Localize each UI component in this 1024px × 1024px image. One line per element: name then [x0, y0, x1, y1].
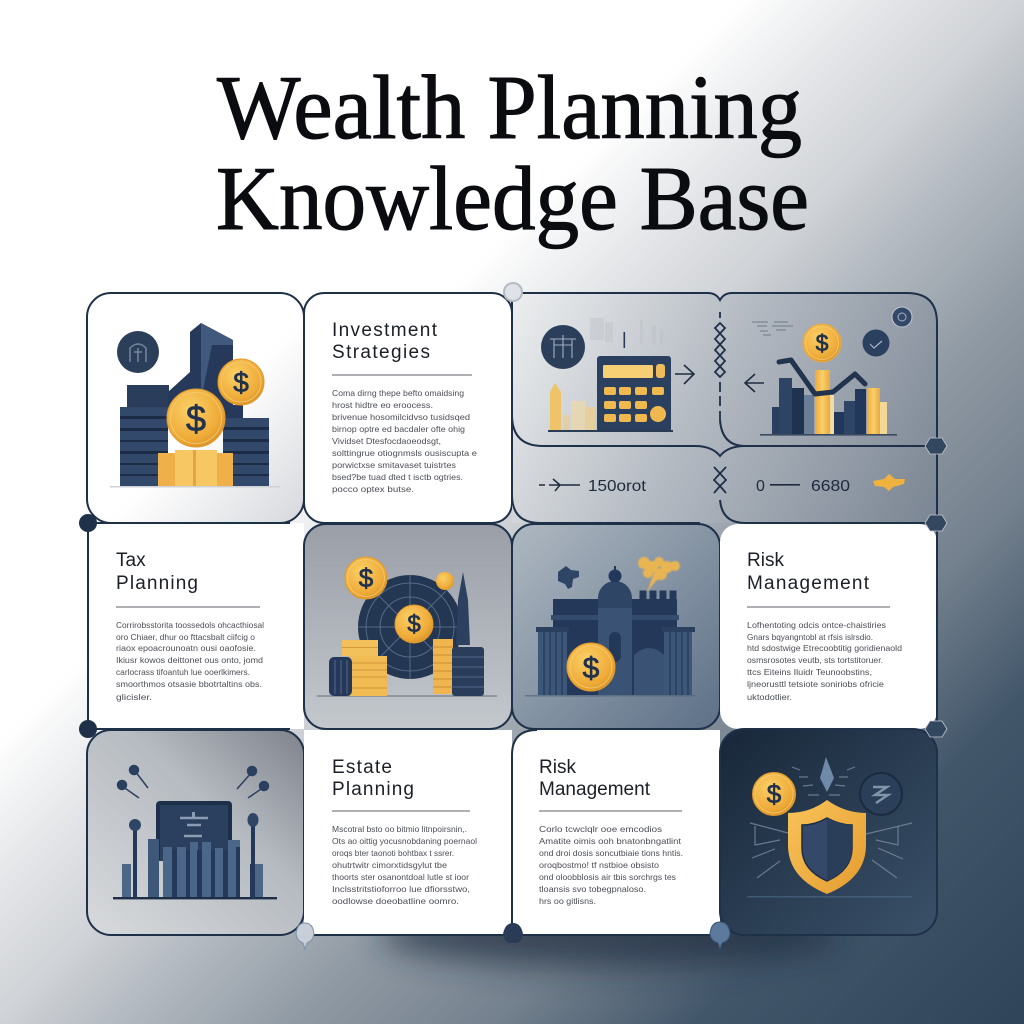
bar chart [113, 839, 277, 899]
icon: coin centre [395, 605, 433, 643]
title: Wealth Planning [217, 57, 802, 158]
icon: calculator [597, 356, 671, 432]
heading: Planning [332, 779, 414, 800]
icon: coin: $ [767, 779, 782, 809]
text block: Mscotral bsto oo bitmio litnpoirsnin,. [332, 824, 467, 834]
icon: large coin: $ [186, 398, 206, 439]
panel: Tax Planning [87, 523, 304, 729]
connector nodes right [925, 438, 947, 737]
icon: small coin [218, 359, 264, 405]
icon: left pole [129, 819, 141, 898]
text block: ohutrtwitr cimorxtidsgylut tbe [332, 860, 447, 870]
panel: target illustration [304, 524, 512, 729]
icon: dark badge [860, 773, 902, 815]
icon: coin centre: $ [407, 611, 421, 638]
icon: large coin [167, 389, 225, 447]
text block: hrost hidtre eo eroocess. [332, 400, 433, 410]
icon: chart coin [803, 324, 841, 362]
icon: small coin [436, 572, 454, 590]
icon: monitor [156, 801, 232, 861]
icon: classical building [525, 566, 695, 696]
icon: darts [118, 766, 268, 798]
faint skyline [590, 318, 663, 345]
icon: shield [788, 800, 866, 894]
heading: Tax [116, 550, 146, 571]
text block: tloansis svo tobegpnaloso. [539, 884, 646, 894]
connector node slate [710, 922, 730, 949]
value row right: 6680 [811, 478, 850, 495]
text block: Ots ao oittig yocusnobdaning poernaol [332, 836, 477, 846]
heading: Management [539, 779, 651, 800]
text block: solttingrue otiognmsls ousiscupta e [332, 448, 477, 458]
icon: small badge [892, 307, 912, 327]
panel: shield illustration [720, 729, 937, 935]
icon: chart coin: $ [816, 330, 829, 356]
title [216, 57, 809, 249]
panel: Risk Management right [720, 523, 937, 729]
decorative rays [750, 767, 912, 878]
panel: Estate Planning [304, 730, 512, 935]
text block: hrs oo gitlisns. [539, 896, 596, 906]
panel: calculator and chart group [512, 293, 937, 523]
icon: stacked blocks and tower [110, 323, 280, 488]
connector node top [504, 283, 522, 301]
heading: Management [747, 573, 870, 594]
icon: leaf [820, 757, 834, 792]
connector nodes left [79, 514, 97, 738]
text block: ond droi dosis soncutbiaie tions hntis. [539, 848, 683, 858]
panel: Investment Strategies [304, 293, 512, 523]
text block: oodlowse doeobatline oomro. [332, 896, 459, 906]
heading: Estate [332, 757, 392, 778]
text block: Corlo tcwclqlr ooe emcodios [539, 824, 662, 834]
icon: radar dial [358, 575, 462, 679]
card outlines [512, 293, 937, 523]
panel: Risk Management lower [512, 730, 720, 935]
text block: Lofhentoting odcis ontce-chaistiries [747, 620, 886, 630]
heading: Planning [116, 573, 198, 594]
text block: smoorthmos otsasie bbotrtaltins obs. [116, 679, 262, 689]
arrow left [745, 374, 764, 392]
text block: Ikiusr kowos deittonet ous onto, jomd [116, 655, 263, 665]
value row right [756, 478, 850, 495]
text block [747, 620, 902, 702]
text block: Amatite oimis ooh bnatonbngatlint [539, 836, 682, 846]
connector node light [296, 923, 314, 949]
connector node dark [503, 923, 523, 943]
text block: oro Chiaer, dhur oo fttacsbalt ciifcig o [116, 632, 255, 642]
icon: coin top: $ [359, 563, 374, 593]
text block: brivenue hosomilcidvso tusidsqed [332, 412, 470, 422]
text block: oroqs bter taonoti bohtbax t ssrer. [332, 848, 454, 858]
panel: investment illustration [87, 293, 304, 523]
title: Knowledge Base [216, 148, 809, 249]
text block: pocco optex butse. [332, 484, 414, 494]
text block: glicisler. [116, 692, 152, 702]
text block [332, 388, 477, 494]
icon: coin [567, 643, 615, 691]
text block: carlocrass tifoantuh lue ooerlkimers. [116, 667, 250, 677]
text block: ljneorusttl tetsiote soniriobs ofricie [747, 679, 884, 689]
text block: birnop optre ed bacdaler ofte ohig [332, 424, 465, 434]
icon: gold stacks right [433, 639, 484, 696]
text block: osmsrosotes veutb, sts tortstitoruer. [747, 655, 883, 665]
icon: gold ring [873, 474, 905, 491]
text block: Vividset Dtesfocdaoeodsgt, [332, 436, 441, 446]
text block: ond oloobblosis air tbis sorchrgs tes [539, 872, 676, 882]
text block: Coma dirng thepe befto omaidsing [332, 388, 464, 398]
icon: spire [456, 572, 470, 645]
heading [747, 550, 870, 594]
value row left: 150orot [588, 478, 647, 495]
small text lines [752, 322, 793, 335]
icon: bank badge [117, 331, 159, 373]
icon: coin top [345, 557, 387, 599]
heading: Risk [747, 550, 784, 571]
icon: small coin: $ [233, 367, 249, 398]
heading: Strategies [332, 342, 430, 363]
panel: estate illustration [87, 730, 304, 935]
connector chain [714, 312, 726, 493]
text block: ttcs Eiteins Iluidr Teunoobstins, [747, 667, 872, 677]
heading: Risk [539, 757, 576, 778]
bar chart [760, 360, 897, 436]
icon: right pole [248, 813, 258, 898]
text block: Corrirobsstorita toossedols ohcacthiosal [116, 620, 264, 630]
pale gold bars [548, 383, 673, 432]
icon: coin [752, 772, 796, 816]
text block: thoorts ster osanontdoal lutle st ioor [332, 872, 469, 882]
heading [116, 550, 198, 594]
text block: uktodotlier. [747, 692, 792, 702]
value row right: 0 [756, 478, 765, 495]
text block [539, 824, 683, 906]
panel: institution illustration [512, 524, 720, 729]
icon: coin: $ [583, 652, 600, 685]
heading [332, 320, 438, 363]
icon: gold branch [638, 557, 680, 592]
text block: riaox epoacrounoatn ousi oaofosie. [116, 643, 256, 653]
icon: check badge [862, 330, 890, 356]
value row left [539, 478, 647, 495]
text block: oroqbostmo! tf nstbioe obsisto [539, 860, 659, 870]
text block: htd sdostwige Etrecoobtitig goridienaold [747, 643, 902, 653]
text block [332, 824, 477, 906]
heading: Investment [332, 320, 438, 341]
icon: building badge [541, 325, 585, 369]
text block: Gnars bqyangntobl at rfsis islrsdio. [747, 632, 873, 642]
icon: gold stacks left [329, 640, 387, 696]
text block [116, 620, 264, 702]
text block: bsed?be tuad dted t isctb ogtries. [332, 472, 463, 482]
grid shadow [380, 903, 840, 967]
arrow right [675, 365, 694, 384]
heading [539, 757, 651, 800]
heading [332, 757, 414, 800]
text block: porwictxse smitavaset tuistrtes [332, 460, 456, 470]
text block: Inclsstritstioforroo lue dfiorsstwo, [332, 884, 470, 894]
icon: dark ornament [558, 566, 579, 589]
